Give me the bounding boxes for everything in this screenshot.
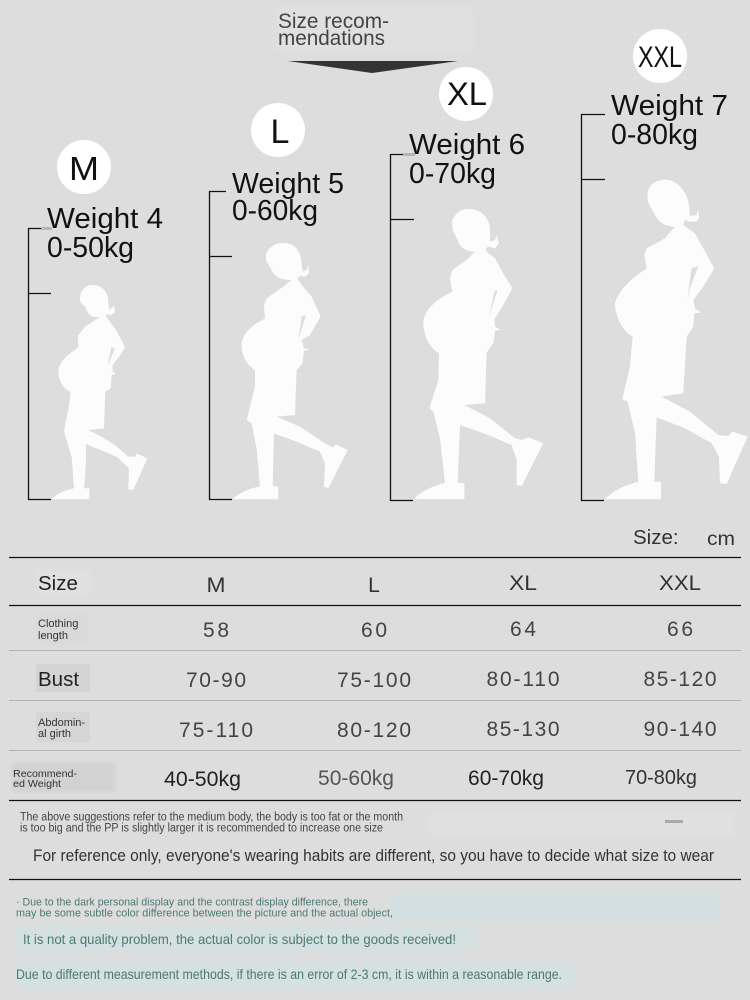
figure column: XL (390, 67, 543, 500)
row: abdominal girth (36, 712, 716, 742)
row: size header: XXL (659, 572, 701, 595)
row: bust: 85-120 (644, 668, 716, 691)
row: abdominal girth: 75-110 (179, 719, 253, 742)
color and measurement notes: · Due to the dark personal display and the contrast display difference, there (16, 896, 368, 908)
size badge: XXL (633, 29, 687, 83)
size badge: XL: XL (447, 76, 487, 112)
row: clothing length: Clothing (38, 618, 78, 630)
row: recommended weight: 70-80kg (625, 767, 697, 789)
size badge: L: L (271, 113, 289, 151)
size badge: M: M (69, 150, 99, 187)
height bracket: M (28, 227, 52, 500)
row: size header: XL (509, 572, 537, 595)
row: bust: Bust (38, 668, 79, 691)
size badge: XL (439, 67, 493, 121)
row: abdominal girth: 90-140 (644, 718, 716, 741)
color and measurement notes: It is not a quality problem, the actual color is subject to the goods received! (23, 931, 456, 947)
row: recommended weight: 40-50kg (164, 768, 241, 791)
title arrow (288, 61, 458, 73)
height bracket: XL (390, 153, 415, 500)
row: clothing length: 66 (667, 618, 693, 641)
color and measurement notes: may be some subtle color difference between the picture and the actual object, (16, 908, 393, 920)
height bracket: XXL (582, 114, 605, 500)
row: size header: Size (38, 572, 78, 595)
title: size recommendations (275, 7, 473, 51)
height bracket: L (210, 192, 232, 500)
row: size header: L (368, 574, 380, 597)
size table (9, 558, 741, 800)
row: recommended weight: Recommend- (13, 769, 77, 780)
row: size header (37, 569, 701, 597)
weight label: XL: Weight 6 (409, 129, 525, 161)
row: recommended weight: ed Weight (13, 779, 61, 790)
figure column: L (210, 103, 348, 500)
weight label: XXL: 0-80kg (611, 119, 698, 151)
row: clothing length (37, 614, 693, 643)
weight label: XXL (611, 90, 728, 151)
title: size recommendations: Size recom- (278, 10, 389, 33)
row: clothing length: 58 (203, 619, 229, 642)
color and measurement notes (15, 893, 720, 990)
row: clothing length: 64 (510, 618, 536, 641)
weight label: M (47, 203, 163, 264)
row: recommended weight: 60-70kg (468, 767, 544, 790)
row: recommended weight (12, 763, 697, 792)
weight label: L: 0-60kg (232, 195, 318, 227)
row: clothing length: length (38, 630, 68, 642)
weight label: XL (409, 129, 525, 190)
silhouette: XL (414, 209, 543, 499)
sizing note (20, 810, 735, 836)
unit label: size in cm: Size: (633, 526, 679, 549)
size badge: XXL: XXL (638, 41, 682, 74)
silhouette: L (233, 243, 348, 499)
row: abdominal girth: 85-130 (486, 718, 560, 741)
figure column: XXL (582, 29, 748, 500)
size badge: M (57, 140, 111, 194)
weight label: L: Weight 5 (232, 168, 344, 200)
weight label: XXL: Weight 7 (611, 90, 728, 122)
sizing note: The above suggestions refer to the medium body, the body is too fat or the month (20, 812, 403, 824)
row: clothing length: 60 (361, 619, 387, 642)
row: bust: 75-100 (337, 669, 411, 692)
row: abdominal girth: 80-120 (337, 719, 411, 742)
row: abdominal girth: al girth (38, 728, 71, 740)
weight label: M: 0-50kg (47, 232, 134, 264)
weight label: L (232, 168, 344, 227)
row: bust (36, 664, 716, 692)
row: bust: 80-110 (486, 668, 560, 691)
color and measurement notes: Due to different measurement methods, if there is an error of 2-3 cm, it is within a reasonable range. (16, 966, 562, 982)
figure column: M (28, 140, 163, 500)
weight label: XL: 0-70kg (409, 158, 496, 190)
row: abdominal girth: Abdomin- (38, 717, 85, 729)
unit label: size in cm (633, 526, 735, 550)
sizing note: is too big and the PP is slightly larger it is recommended to increase one size (20, 822, 383, 834)
title: size recommendations: mendations (278, 27, 385, 50)
size badge: L (251, 103, 305, 157)
unit label: size in cm: cm (707, 529, 735, 550)
weight label: M: Weight 4 (47, 203, 163, 235)
silhouette: XXL (605, 180, 748, 499)
silhouette: M (52, 285, 147, 499)
reference disclaimer: For reference only, everyone's wearing habits are different, so you have to decide what size to wear (33, 847, 714, 865)
row: size header: M (206, 574, 226, 597)
row: bust: 70-90 (186, 669, 246, 692)
row: recommended weight: 50-60kg (318, 767, 394, 790)
